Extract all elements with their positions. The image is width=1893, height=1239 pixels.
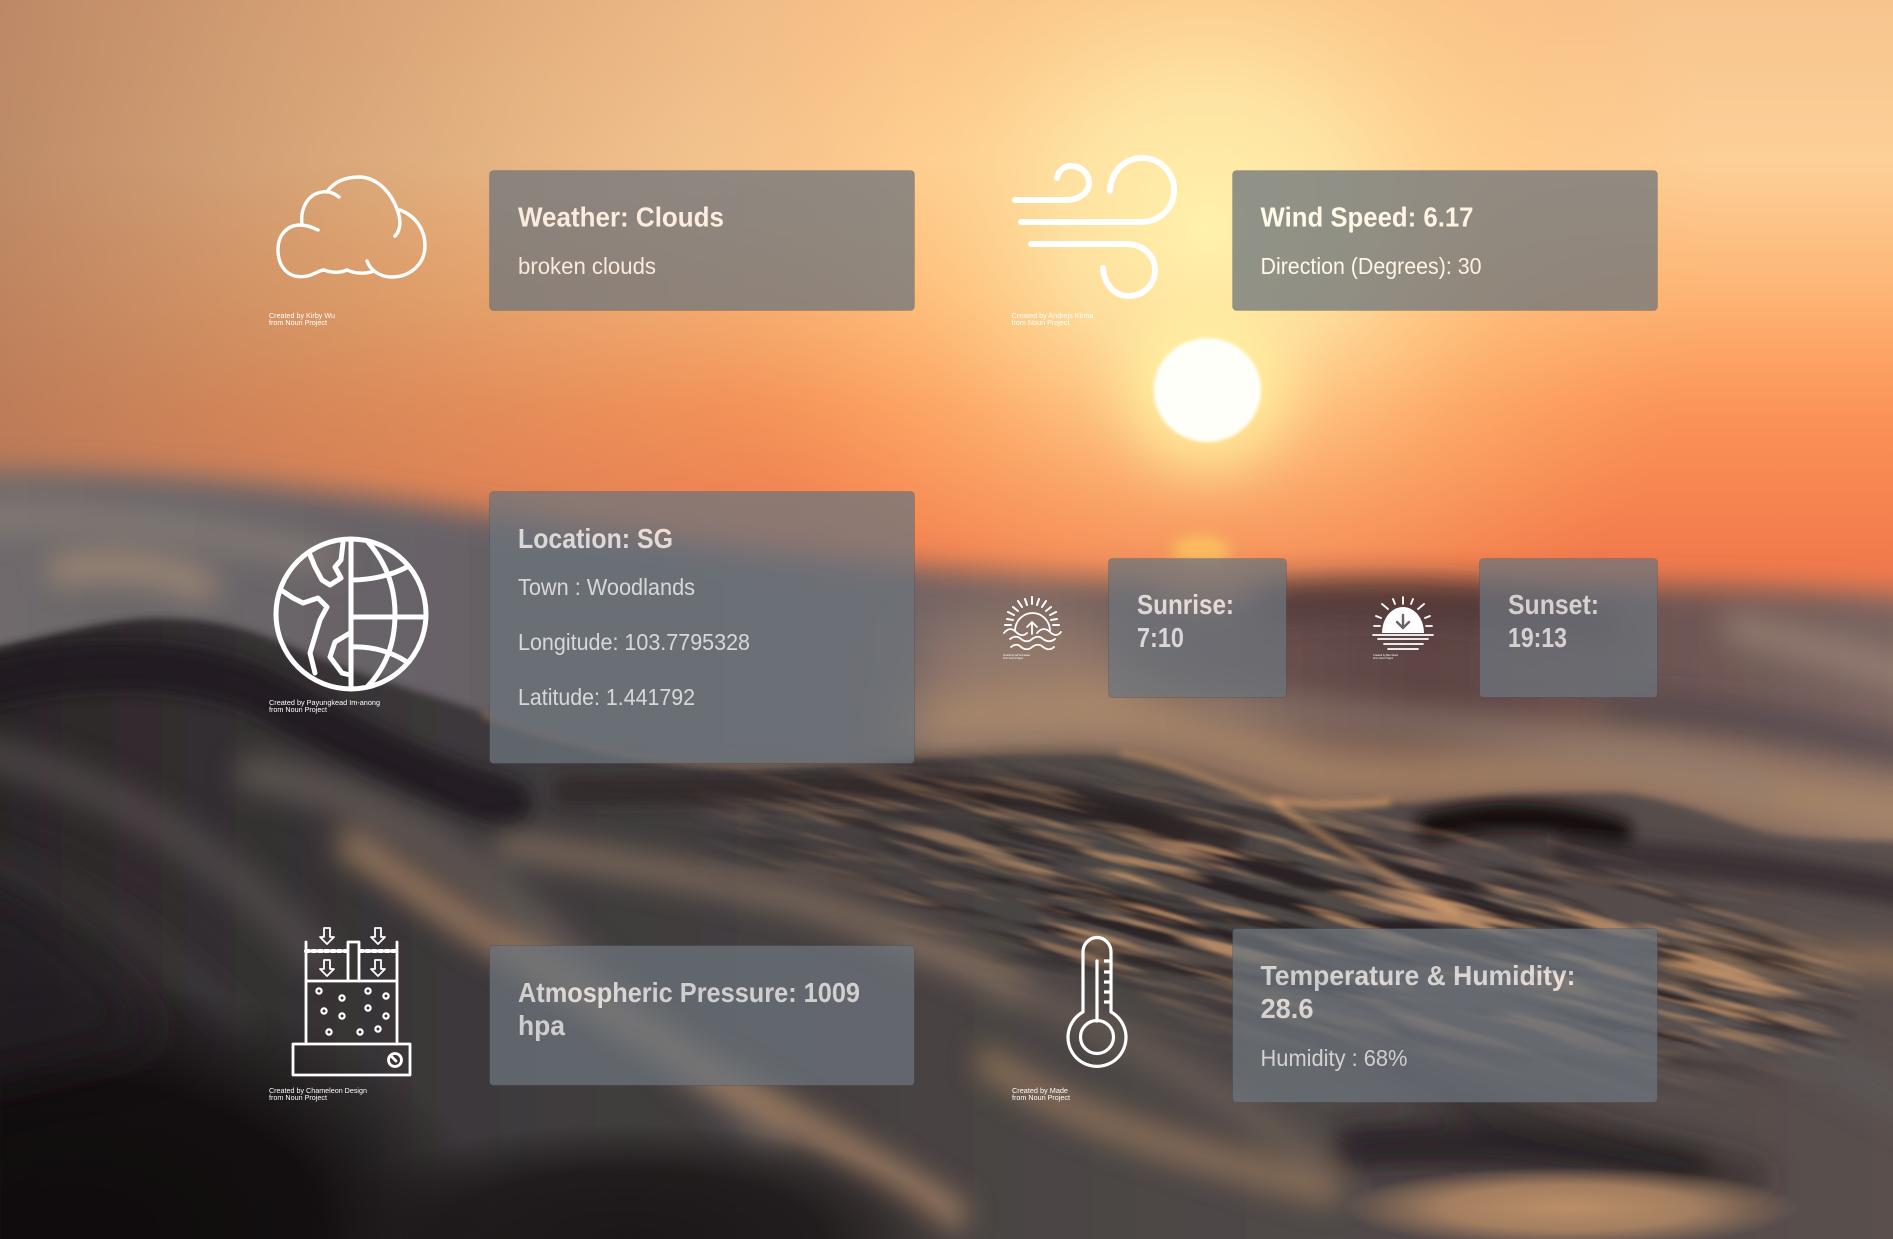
panel: wind — [1232, 170, 1658, 310]
text: latitude: Latitude: 1.441792 — [518, 684, 695, 710]
panel: temperature and humidity — [1232, 928, 1658, 1102]
ripple texture — [706, 760, 1859, 1083]
heading: wind speed: Wind Speed: 6.17 — [1260, 202, 1474, 232]
icon credit: Created by Andrejs Kirma — [1012, 313, 1094, 320]
heading: sunrise time: 7:10 — [1137, 622, 1184, 653]
sun reflection — [1172, 536, 1230, 565]
icon: atmospheric pressure — [269, 928, 410, 1102]
icon: sunrise — [1003, 597, 1061, 660]
text: humidity: Humidity : 68% — [1260, 1045, 1408, 1071]
text: town: Town : Woodlands — [518, 574, 695, 600]
tan reflection lower right — [1328, 1159, 1811, 1239]
crest highlights — [483, 715, 1456, 913]
icon credit: from Noun Project — [269, 1095, 327, 1102]
icon credit: Created by Adi Kurniawan — [1003, 653, 1030, 657]
icon: cloud — [269, 177, 425, 327]
icon: globe — [269, 539, 426, 714]
icon credit: Created by Chameleon Design — [269, 1088, 367, 1095]
crest shadows — [0, 666, 1893, 896]
panel: atmospheric pressure — [490, 946, 914, 1086]
heading: weather: Weather: Clouds — [518, 202, 724, 232]
sun — [1125, 310, 1289, 470]
main wave body — [0, 918, 1893, 1239]
panel: sunrise — [1108, 558, 1286, 698]
heading: sunrise: Sunrise: — [1137, 589, 1234, 620]
icon credit: from Noun Project — [1003, 656, 1023, 660]
icon credit: from Noun Project — [1012, 320, 1070, 327]
heading: temperature: Temperature & Humidity: — [1260, 960, 1576, 991]
panel: weather — [490, 170, 914, 310]
dark lower water — [0, 978, 497, 1239]
icon: thermometer — [1012, 938, 1126, 1102]
heading: location: Location: SG — [518, 523, 673, 554]
icon credit: from Noun Project — [1012, 1095, 1070, 1102]
icon credit: from Noun Project — [1373, 656, 1393, 660]
heading: pressure: Atmospheric Pressure: 1009 — [518, 977, 860, 1008]
panel: sunset — [1480, 558, 1658, 698]
tan band above far crest — [930, 644, 1893, 821]
heading: pressure unit: hpa — [518, 1010, 565, 1041]
icon: sunset — [1373, 597, 1433, 660]
icon: wind — [1012, 158, 1174, 327]
text: description: broken clouds — [518, 253, 656, 279]
text: longitude: Longitude: 103.7795328 — [518, 629, 750, 655]
heading: temperature value: 28.6 — [1260, 993, 1314, 1024]
far water haze — [0, 470, 1893, 882]
large water ribbons — [0, 749, 1893, 1214]
icon credit: Created by Kirby Wu — [269, 313, 335, 320]
icon credit: Created by Ben Davis — [1373, 653, 1399, 657]
panel: location — [490, 492, 914, 764]
heading: sunset: Sunset: — [1508, 589, 1599, 620]
icon credit: Created by Made — [1012, 1088, 1068, 1095]
icon credit: from Noun Project — [269, 707, 327, 714]
text: wind direction: Direction (Degrees): 30 — [1260, 253, 1482, 279]
icon credit: Created by Payungkead Im-anong — [269, 700, 380, 707]
icon credit: from Noun Project — [269, 320, 327, 327]
heading: sunset time: 19:13 — [1508, 622, 1567, 653]
